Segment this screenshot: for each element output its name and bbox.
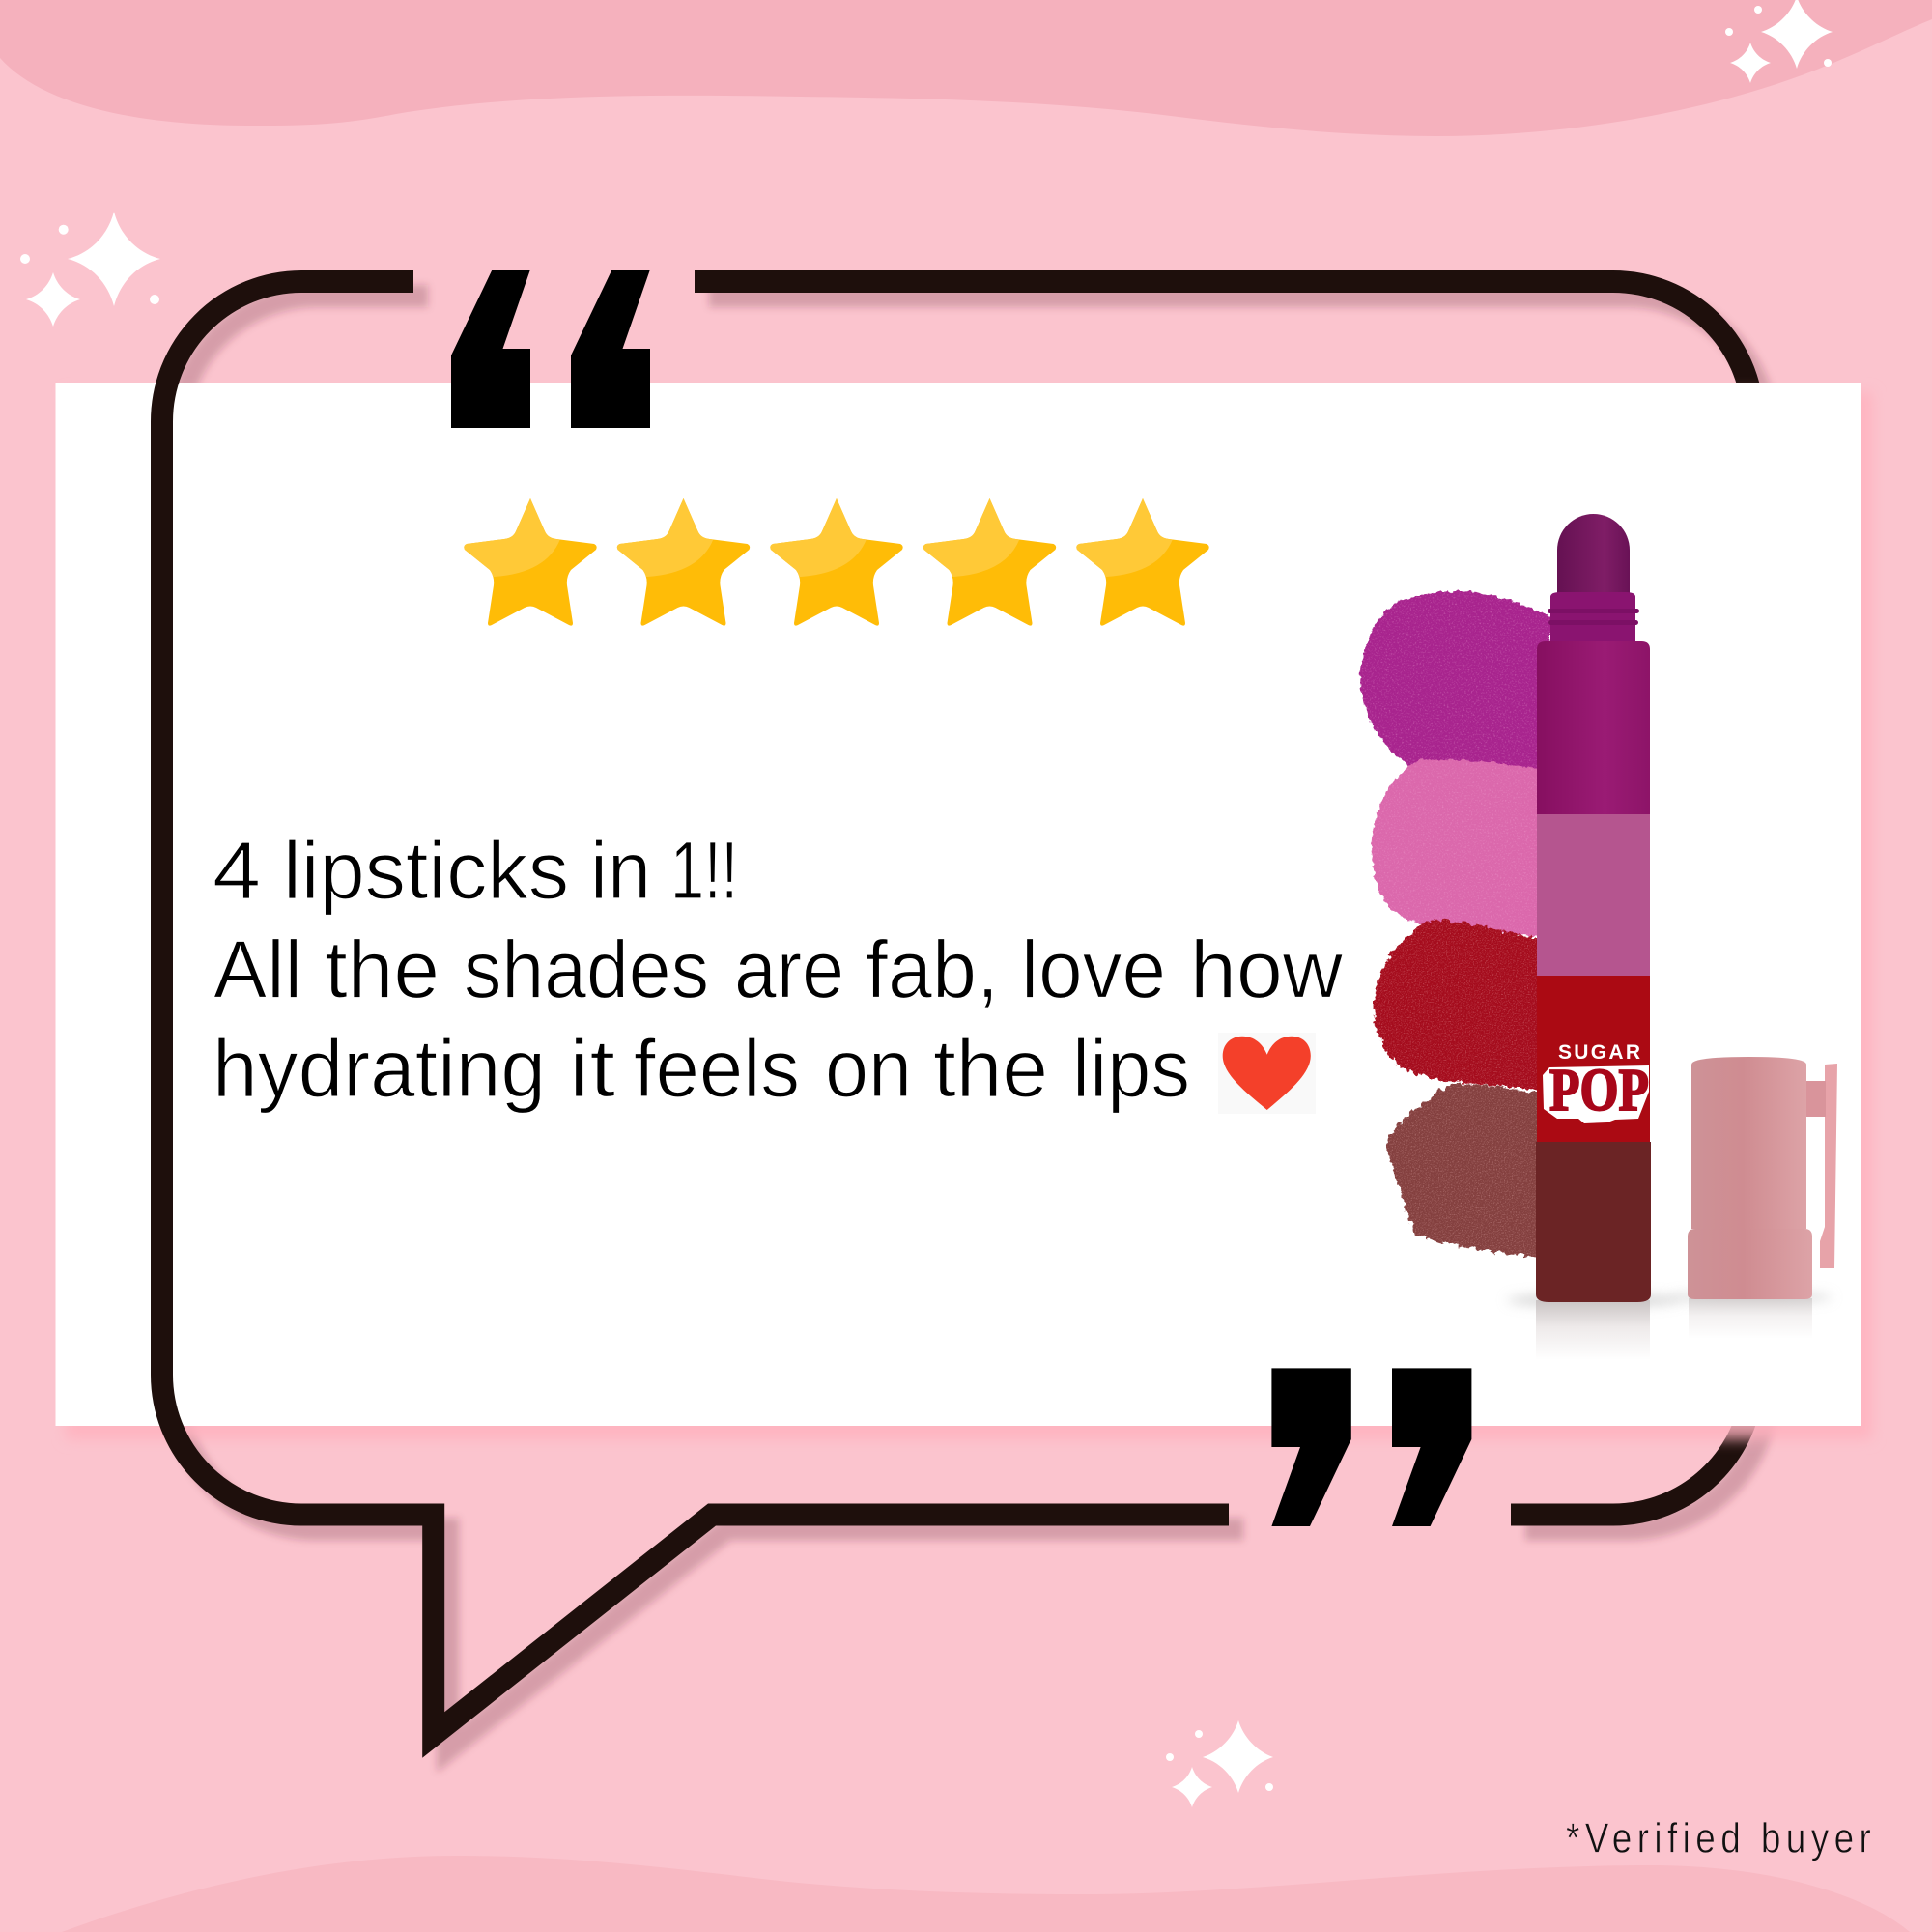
swatch: red [1374,920,1550,1090]
cap clip [1820,1064,1837,1268]
review text [213,825,1343,1114]
review text: in [590,825,651,916]
speech bubble outline: right part behind panel [695,282,1753,1515]
white panel [56,383,1861,1426]
sparkles: left [20,212,160,327]
review text: it [569,1023,615,1114]
cap body [1691,1057,1806,1229]
product image: reflection [1507,1292,1833,1360]
icon: heart [1218,1033,1316,1114]
speech bubble outline: left part with tail [161,282,1229,1735]
review text: 4 [213,825,261,916]
review text: shades [464,923,709,1014]
review text: hydrating [213,1023,546,1114]
product image: lipstick swatches [1360,591,1550,1258]
footnote: verified buyer: *Verified buyer [1566,1813,1871,1861]
review text: fab, [866,923,999,1014]
star 2 [616,498,750,626]
logo: SUGAR [1558,1041,1640,1064]
tube segment: red [1537,976,1650,1143]
sparkles: bottom [1166,1720,1273,1807]
review text: All [213,923,302,1014]
tube segment: purple [1537,641,1650,816]
collar [1548,592,1639,647]
review text: on [825,1023,912,1114]
tube segment: maroon [1536,1142,1651,1302]
review text: 1!! [670,825,738,916]
star 4 [923,498,1057,626]
product image: lipstick tube [1536,514,1651,1302]
star 3 [770,498,903,626]
bullet [1557,514,1630,595]
speech bubble drop shadow [176,296,1768,1749]
swatch: brown [1385,1084,1550,1258]
logo: POP [1549,1058,1649,1123]
bottom wave [62,1856,1910,1932]
opening quotation mark [451,270,650,428]
closing quotation mark [1271,1368,1471,1526]
review text: the [933,1023,1048,1114]
swatch: magenta [1360,591,1550,773]
logo [1543,1041,1649,1123]
review text: feels [634,1023,800,1114]
review text: the [325,923,440,1014]
swatch: pink [1372,760,1550,937]
review text: lipsticks [283,825,569,916]
star 5 [1076,498,1209,626]
review text: lips [1072,1023,1190,1114]
review text: are [734,923,844,1014]
sparkles: top right [1725,0,1833,83]
product image: lipstick cap [1688,1057,1837,1299]
white panel shadow [66,392,1872,1439]
top wave [0,0,1932,136]
review text: how [1190,923,1343,1014]
star 1 [464,498,597,626]
review text: love [1021,923,1166,1014]
tube segment: pink [1537,814,1650,977]
five star rating [453,494,1209,626]
cap base [1688,1229,1812,1299]
